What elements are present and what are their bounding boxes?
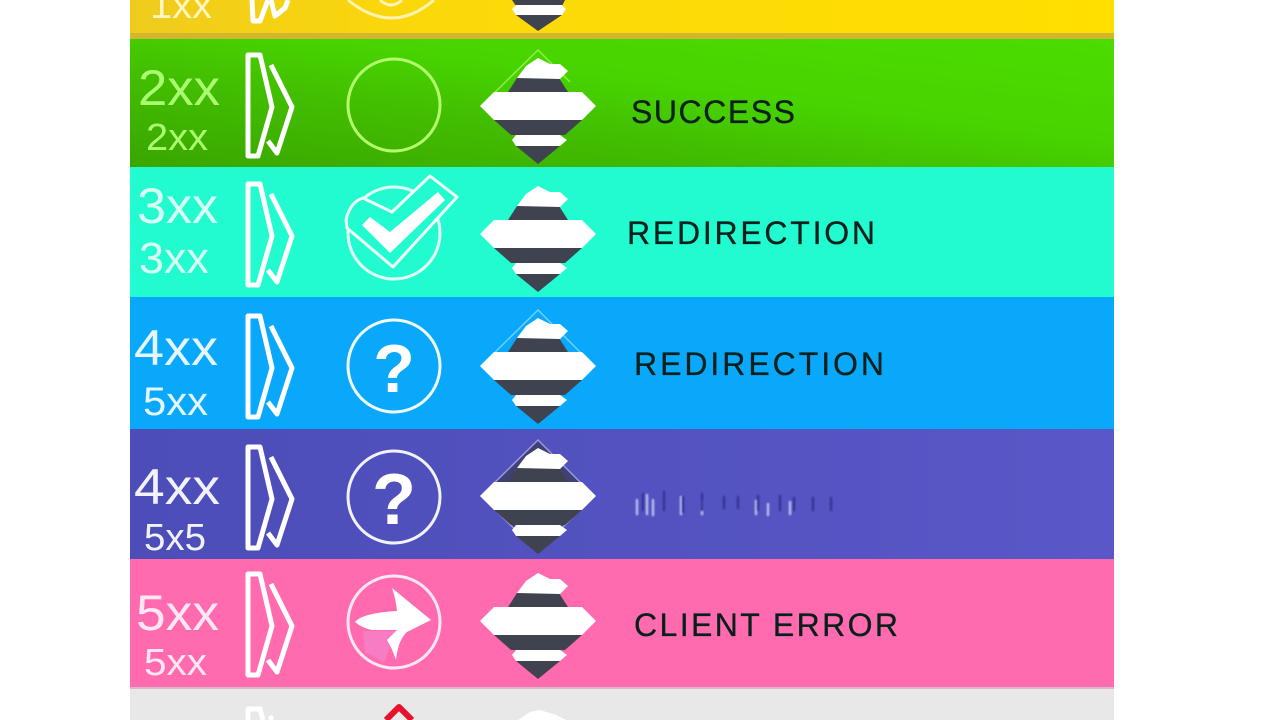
code labels 2xx (138, 60, 220, 159)
icon: circle (348, 0, 434, 18)
icon: question circle (348, 320, 440, 412)
band: purple 4xx 5x5 (130, 429, 1114, 559)
icon: question circle (348, 451, 440, 543)
icon: chevrons (248, 574, 292, 675)
label: redirection: REDIRECTION (634, 346, 884, 382)
icon: chevrons (248, 709, 272, 720)
code labels 3xx: 3xx (139, 234, 209, 283)
icon: striped diamond (480, 186, 596, 292)
label: success: SUCCESS (631, 94, 795, 130)
code labels 3xx: 3xx (137, 178, 218, 234)
icon: striped diamond (480, 573, 596, 679)
icon: circle with check (346, 176, 457, 279)
icon: empty circle (348, 59, 440, 151)
band: 2xx green success (130, 39, 1114, 167)
code labels 2xx: 2xx (146, 117, 208, 159)
icon: chevrons (248, 316, 292, 417)
band: 3xx teal redirection (130, 167, 1114, 297)
band: pink client error (130, 559, 1114, 687)
icon: striped diamond (512, 0, 566, 31)
code labels 5xx: 5xx (136, 585, 219, 641)
icon: chevrons (248, 447, 292, 548)
code labels 4xx and 5xx: 4xx (134, 320, 218, 376)
band: 4xx blue redirection (130, 297, 1114, 429)
icon: striped diamond (480, 50, 596, 164)
icon: arrow circle (348, 576, 440, 668)
icon: chevrons (248, 184, 292, 285)
code labels 2xx: 2xx (138, 60, 220, 116)
icon: striped diamond (480, 310, 596, 424)
icon: chevrons (252, 0, 288, 21)
code labels 3xx (137, 178, 218, 283)
code labels 4xx and 5xx (134, 320, 218, 424)
band: 1xx yellow (130, 0, 1114, 39)
label: client error: CLIENT ERROR (634, 607, 898, 643)
icon: striped diamond (480, 440, 596, 554)
garbled label marks (637, 492, 831, 515)
icon: question circle: ? (373, 331, 415, 407)
band: grey partial row (130, 687, 1114, 720)
code labels 4xx and 5x5: 5x5 (144, 517, 206, 559)
code labels 5xx: 5xx (144, 642, 207, 684)
icon: question circle: ? (372, 460, 416, 540)
code labels 4xx and 5x5: 4xx (134, 459, 220, 515)
icon: red warning tip (386, 707, 412, 720)
code labels 4xx and 5xx: 5xx (143, 380, 208, 424)
icon: chevrons (248, 55, 292, 156)
code labels 4xx and 5x5 (134, 459, 220, 559)
icon: striped diamond (518, 710, 566, 720)
label: redirection: REDIRECTION (627, 215, 875, 251)
code labels 5xx (136, 585, 219, 684)
